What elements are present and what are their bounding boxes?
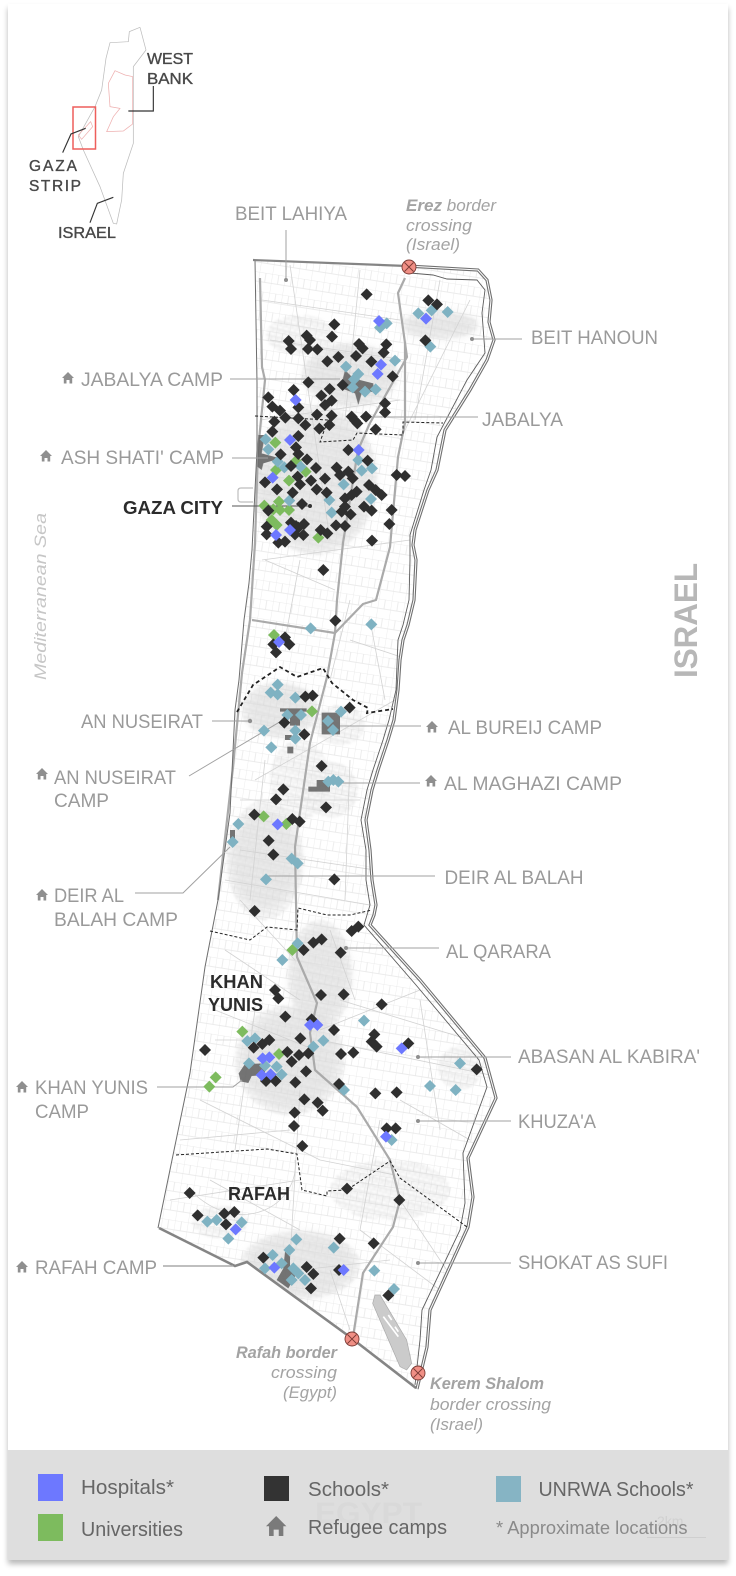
markers: schools — [184, 288, 483, 1301]
map: Gaza Strip base — [150, 255, 500, 1395]
markers: hospitals — [230, 313, 432, 1276]
inset: Israel outline — [78, 27, 146, 224]
legend: hospitals — [38, 1474, 174, 1501]
label: Khan Yunis city: YUNIS — [208, 995, 263, 1015]
inset: red locator box — [73, 107, 96, 149]
icon: Rafah crossing — [345, 1332, 359, 1346]
label: Kerem Shalom border crossing: border crossing — [430, 1396, 552, 1414]
label: Kerem Shalom border crossing: Kerem Shalom — [430, 1375, 544, 1393]
label: Gaza City: GAZA CITY — [123, 498, 223, 518]
inset: West Bank outline — [107, 71, 133, 132]
label: Khuza'a: KHUZA'A — [518, 1112, 596, 1133]
label: Al Maghazi Camp: AL MAGHAZI CAMP — [444, 774, 622, 795]
markers: universities — [203, 437, 324, 1093]
north boundary — [253, 260, 478, 270]
label: Khan Yunis Camp: KHAN YUNIS — [35, 1078, 148, 1099]
label: Rafah border crossing: crossing — [271, 1364, 338, 1382]
label: An Nuseirat Camp: CAMP — [54, 791, 109, 812]
label: Abasan Al Kabira': ABASAN AL KABIRA' — [518, 1047, 700, 1068]
inset label: West Bank: WEST — [147, 51, 194, 68]
label: Al Qarara: AL QARARA — [446, 942, 551, 963]
label: Jabalya Camp: JABALYA CAMP — [81, 370, 223, 391]
legend: note: * Approximate locations — [496, 1518, 688, 1538]
label: Deir Al Balah Camp: DEIR AL — [54, 886, 124, 907]
label: Rafah border crossing: Rafah border — [236, 1344, 339, 1362]
label: Erez border crossing: Erez border — [406, 197, 494, 215]
Kerem Shalom airstrip — [373, 1295, 412, 1370]
label: An Nuseirat: AN NUSEIRAT — [81, 712, 203, 733]
label: Deir Al Balah: DEIR AL BALAH — [444, 868, 584, 889]
legend: UNRWA schools — [496, 1476, 694, 1502]
eastern fence, outer double line — [366, 266, 496, 1389]
leader lines and place dots — [135, 230, 522, 1266]
inset label: Israel: ISRAEL — [58, 225, 116, 242]
harbour outline — [238, 488, 253, 502]
faded scale bar behind legend — [647, 1513, 706, 1538]
inset label: West Bank: BANK — [147, 71, 194, 88]
western boundary — [158, 260, 257, 1228]
faded Egypt label behind legend: EGYPT — [315, 1497, 422, 1530]
legend: universities — [38, 1514, 183, 1541]
label: An Nuseirat Camp — [36, 768, 176, 812]
icon: Kerem Shalom crossing — [411, 1366, 425, 1380]
label: Shokat As Sufi: SHOKAT AS SUFI — [518, 1253, 668, 1274]
label: Erez border crossing: crossing — [406, 217, 473, 235]
label: Israel: ISRAEL — [668, 563, 704, 678]
icon: Erez crossing — [402, 260, 416, 274]
label: Khan Yunis city: KHAN — [210, 972, 263, 992]
main road network — [252, 278, 407, 1337]
legend: hospitals: Hospitals* — [81, 1477, 174, 1499]
label: Jabalya: JABALYA — [482, 410, 563, 431]
label: Khan Yunis Camp — [16, 1078, 148, 1123]
label: Beit Lahiya: BEIT LAHIYA — [235, 204, 347, 225]
southern fence — [159, 1228, 416, 1388]
label: Deir Al Balah Camp: BALAH CAMP — [54, 910, 178, 931]
legend: schools — [264, 1476, 389, 1501]
label: Erez border crossing: (Israel) — [406, 236, 460, 254]
legend: UNRWA schools: UNRWA Schools* — [538, 1479, 694, 1501]
label: Rafah city: RAFAH — [228, 1184, 290, 1204]
label: Ash Shati' Camp: ASH SHATI' CAMP — [61, 448, 224, 469]
markers: UNRWA schools — [201, 304, 466, 1295]
label: Al Bureij Camp: AL BUREIJ CAMP — [448, 718, 602, 739]
governorate dashed boundaries — [176, 416, 467, 1227]
legend: universities: Universities — [81, 1519, 183, 1541]
inset label: Gaza Strip: GAZA — [29, 158, 78, 175]
legend: refugee camps: Refugee camps — [308, 1517, 447, 1539]
label: Deir Al Balah Camp — [36, 886, 178, 931]
inset label: Gaza Strip: STRIP — [29, 178, 81, 195]
inset: leaders — [63, 86, 153, 223]
label: Khan Yunis Camp: CAMP — [35, 1102, 89, 1123]
label: Rafah Camp: RAFAH CAMP — [35, 1258, 157, 1279]
label: Kerem Shalom border crossing: (Israel) — [430, 1416, 483, 1434]
label: An Nuseirat Camp: AN NUSEIRAT — [54, 768, 176, 789]
label: Mediterranean Sea: Mediterranean Sea — [31, 513, 50, 680]
coast road — [218, 278, 265, 900]
eastern fence, inner — [361, 273, 487, 1385]
faded scale bar behind legend: 2km — [657, 1513, 683, 1529]
street texture — [150, 255, 500, 1395]
panel: legend — [8, 1450, 728, 1560]
refugee camp footprints — [230, 370, 373, 1288]
inset: Gaza Strip outline — [78, 122, 93, 139]
label: Rafah border crossing: (Egypt) — [283, 1384, 337, 1402]
legend: schools: Schools* — [308, 1479, 389, 1501]
inset locator map — [29, 27, 194, 242]
label: Beit Hanoun: BEIT HANOUN — [531, 328, 658, 349]
